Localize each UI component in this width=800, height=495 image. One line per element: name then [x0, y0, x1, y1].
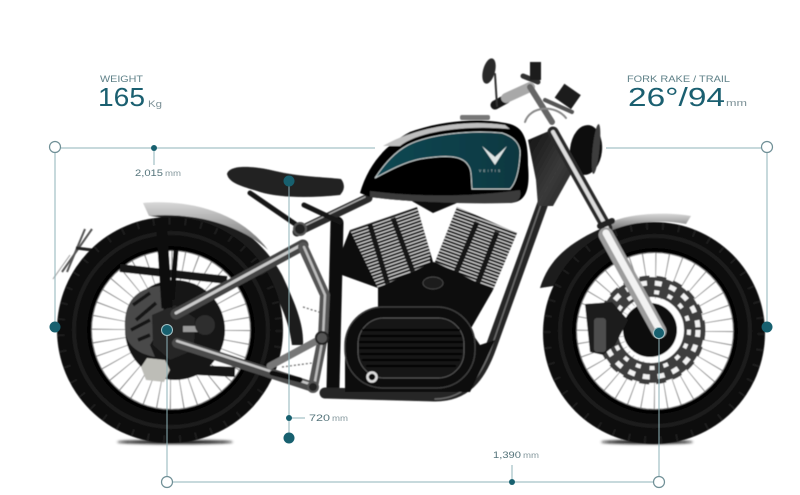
- rear spokes: [116, 275, 226, 385]
- markers: open circles: [50, 142, 772, 488]
- wheelbase value: 1,390: [493, 450, 521, 461]
- tank logo: VEITIS: [479, 169, 502, 173]
- motorcycle: [53, 57, 765, 444]
- weight value: Kg: [148, 99, 162, 110]
- rear wheel: [57, 217, 283, 443]
- steering head and frame neck: [528, 128, 572, 206]
- weight value: 165: [98, 82, 145, 112]
- frame tubes: [250, 178, 552, 399]
- fuel tank: [360, 115, 529, 203]
- rear fender: [143, 202, 303, 345]
- seat height value: [309, 413, 348, 424]
- drive chain: [282, 307, 322, 367]
- front wheel: [543, 222, 765, 444]
- wheel shadows: [117, 440, 693, 444]
- headlight: [567, 123, 605, 177]
- length value: [135, 168, 181, 179]
- wheelbase value: mm: [523, 451, 539, 460]
- rear fender strut: [161, 218, 167, 308]
- front fender: [540, 214, 691, 288]
- wheelbase value: [493, 450, 539, 461]
- handlebars and controls: [480, 57, 581, 122]
- front brake disc: [585, 277, 704, 383]
- rear disc and hub: [120, 268, 235, 380]
- seat: [227, 167, 344, 197]
- front spokes: [600, 276, 710, 386]
- icon: mirror: [480, 57, 498, 85]
- engine: [340, 198, 525, 392]
- fork rake label: FORK RAKE / TRAIL: [627, 74, 730, 85]
- infographic: motorcycle dimensions: [48, 58, 774, 488]
- tank cap: [460, 115, 490, 120]
- markers: filled dots: [50, 145, 772, 485]
- tank logo: [479, 146, 507, 173]
- swingarm: [176, 223, 328, 392]
- fork: [553, 132, 659, 331]
- weight value: [98, 82, 162, 112]
- fork rake value: 26°/94: [628, 82, 725, 112]
- length value: 2,015: [135, 168, 163, 179]
- crankcase: [345, 262, 495, 392]
- primary cover: [345, 307, 475, 388]
- length value: mm: [165, 169, 181, 178]
- dimension: wheelbase lines: [167, 330, 659, 482]
- license plate bracket: [53, 229, 92, 279]
- engine badge: [423, 277, 443, 289]
- fork rake value: mm: [726, 98, 747, 109]
- dimension: seat height lines: [289, 181, 305, 438]
- seat height value: mm: [332, 414, 348, 423]
- fork rake value: [628, 82, 747, 112]
- dimension: overall length frame: [55, 148, 767, 322]
- left cylinder fins: [350, 206, 434, 288]
- rear brake caliper: [141, 358, 170, 382]
- teal panel: [375, 132, 520, 189]
- right cylinder fins: [434, 206, 518, 290]
- weight label: WEIGHT: [100, 74, 143, 85]
- seat height value: 720: [309, 413, 330, 424]
